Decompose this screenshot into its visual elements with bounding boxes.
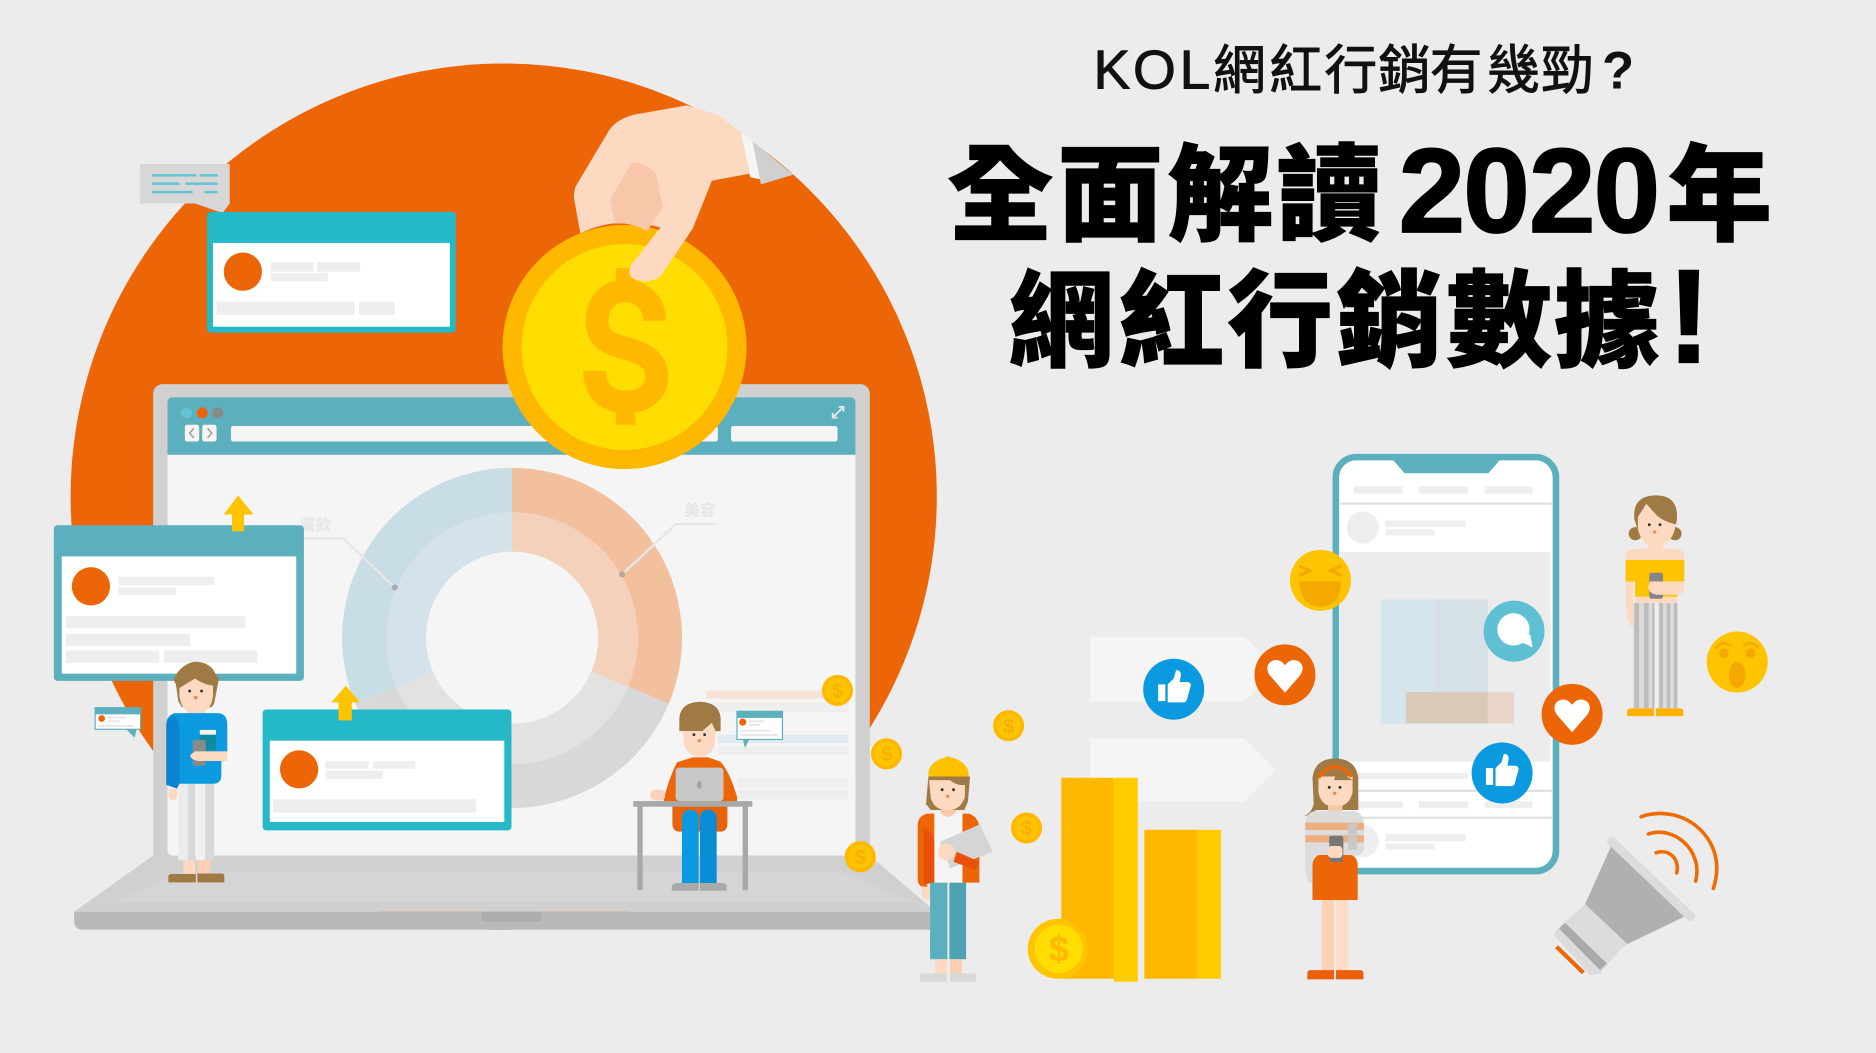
- pale arrow upper: [1090, 637, 1277, 701]
- headline line one: 全面解讀: [948, 111, 1382, 263]
- woman in yellow top: [1626, 495, 1685, 716]
- shirt pocket: [200, 730, 216, 750]
- jacket: [918, 814, 979, 887]
- small notification right: [736, 711, 783, 748]
- label: beauty: [619, 499, 716, 577]
- hair: [173, 662, 219, 707]
- striped trousers: [1633, 603, 1677, 708]
- megaphone mouth strip: [1557, 947, 1583, 973]
- laptop: [676, 768, 723, 801]
- laptop screen bezel: [153, 384, 870, 863]
- heart icon: [1542, 684, 1603, 745]
- laptop: [74, 384, 936, 930]
- coin: [845, 841, 876, 872]
- phone and hand: [1329, 836, 1343, 862]
- upload arrow one: [224, 495, 254, 531]
- upload arrow two: [331, 686, 360, 720]
- orange background circle: [71, 63, 937, 930]
- held laptop: [940, 824, 993, 868]
- donut segment: beauty: [512, 468, 682, 704]
- headline line one: 年: [1667, 111, 1772, 263]
- subtitle: ?: [1602, 42, 1634, 101]
- blue shirt: [166, 713, 227, 789]
- headline line two: 網紅行銷數據: [1009, 237, 1659, 389]
- hand below sleeve: [169, 789, 177, 800]
- tall bar: [1061, 778, 1114, 979]
- browser window: [168, 397, 855, 856]
- coin: [871, 738, 902, 769]
- coin: $: [855, 847, 867, 869]
- arm and hand: [938, 844, 955, 860]
- donut segment: other: [355, 638, 669, 808]
- thumbs up icon: [1472, 742, 1533, 803]
- woman with striped sweater: [1303, 758, 1364, 979]
- legs: [682, 810, 699, 884]
- man with phone: [166, 662, 227, 882]
- laptop front edge: [74, 912, 936, 930]
- hair: [1634, 495, 1677, 534]
- shoes: [1307, 970, 1363, 979]
- coin: $: [881, 744, 893, 766]
- pale arrow lower: [1090, 738, 1275, 802]
- phone: [193, 740, 206, 766]
- title block: [948, 29, 1772, 392]
- phone: [1649, 573, 1663, 599]
- coin: $: [1021, 818, 1033, 840]
- comment icon: [1484, 601, 1545, 662]
- face: [683, 723, 715, 757]
- arm: [190, 751, 227, 761]
- face: [1318, 777, 1353, 807]
- coin: [822, 675, 853, 706]
- pants: [178, 784, 188, 860]
- surprised emoji: [1707, 632, 1768, 693]
- hair buns: [1629, 527, 1642, 540]
- label: food: 餐飲: [300, 513, 332, 535]
- shoes: [672, 883, 727, 891]
- face: [929, 780, 965, 811]
- megaphone neck: [1554, 904, 1627, 975]
- phone: [1336, 457, 1556, 871]
- hand at hip: [922, 887, 930, 900]
- donut chart: [300, 468, 716, 808]
- yellow top: [1626, 560, 1684, 597]
- coin: [993, 710, 1024, 741]
- desk: [633, 801, 752, 807]
- neck and shoulders: [1626, 543, 1685, 561]
- legs: [935, 959, 947, 974]
- trousers: [930, 883, 947, 959]
- profile card left: [54, 525, 304, 681]
- midriff: [1635, 597, 1677, 603]
- hair: [926, 777, 970, 810]
- headline line two: !: [1667, 243, 1711, 392]
- post image: [1340, 552, 1551, 762]
- lower post rows: [1358, 773, 1468, 779]
- short bar: [1144, 830, 1197, 979]
- neck: [1328, 805, 1342, 812]
- subtitle: KOL: [1094, 39, 1210, 101]
- neck and face: [188, 708, 205, 720]
- profile card lower: [263, 710, 511, 830]
- small notification left: [95, 707, 141, 738]
- laughing emoji: [1290, 550, 1351, 611]
- hat: [928, 756, 969, 777]
- coin: $: [832, 681, 844, 703]
- donut segment: food: [342, 468, 512, 704]
- laptop keyboard deck: [74, 856, 936, 912]
- headline line one: 2020: [1399, 125, 1660, 258]
- coin: [1011, 812, 1042, 844]
- screen side list rows: [706, 690, 848, 799]
- subtitle: 網紅行銷有幾勁: [1213, 29, 1594, 105]
- legs and shoes: [183, 860, 195, 873]
- notch: [1393, 460, 1500, 473]
- hair: [679, 702, 721, 731]
- megaphone cone: [1585, 845, 1684, 944]
- hand cuff: [741, 132, 793, 184]
- skirt: [1312, 855, 1358, 900]
- big dollar coin: [502, 225, 747, 469]
- hair: [1303, 758, 1358, 816]
- post header: [1347, 512, 1379, 544]
- face: [1638, 504, 1675, 548]
- megaphone rim: [1612, 841, 1691, 917]
- heart icon: [1254, 644, 1315, 705]
- woman with hard hat: [918, 756, 993, 982]
- shoes: [1627, 708, 1683, 716]
- orange shirt: [664, 757, 737, 803]
- megaphone band: [1559, 923, 1607, 970]
- thumbs up icon: [1143, 659, 1204, 720]
- bar chart: [1061, 778, 1221, 982]
- large coin by bars: [1028, 919, 1088, 979]
- sound waves: [1641, 813, 1717, 888]
- man at desk: [633, 702, 752, 891]
- hand: [650, 790, 665, 800]
- white shirt: [934, 812, 962, 883]
- sweater: [1305, 811, 1364, 883]
- left arm: [1626, 582, 1633, 627]
- profile card top: [207, 212, 456, 333]
- legs: [1322, 900, 1334, 971]
- label: food: [300, 513, 398, 591]
- megaphone: [1554, 813, 1717, 975]
- shoes: [920, 973, 976, 982]
- label: beauty: 美容: [684, 499, 716, 521]
- arm and hand: [1648, 582, 1684, 595]
- hand placing coin: [574, 105, 750, 281]
- speech bubble top left: [140, 164, 230, 213]
- large coin by bars: $: [1049, 929, 1069, 969]
- coin: $: [1003, 716, 1015, 738]
